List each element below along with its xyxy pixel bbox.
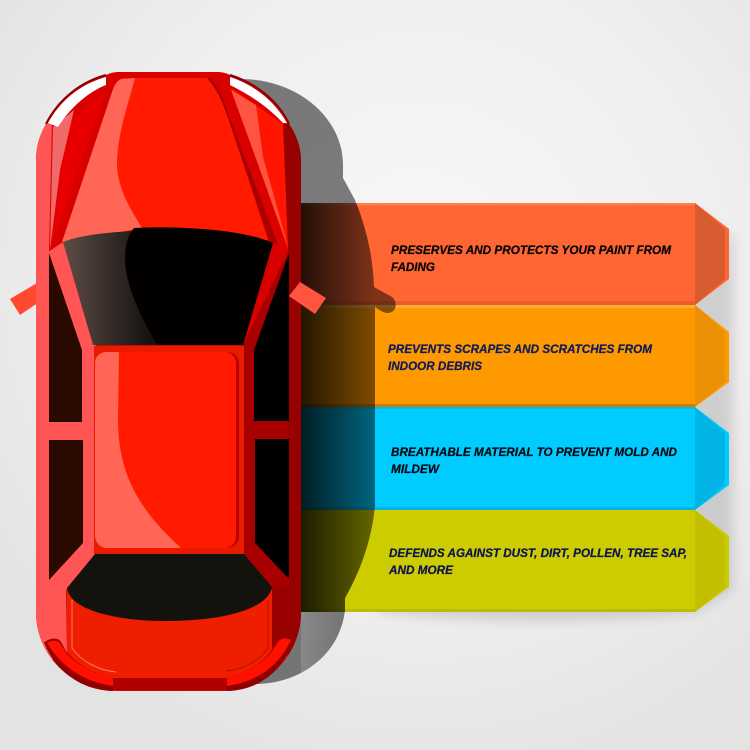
banner 4: dust and dirt: DEFENDS AGAINST DUST, DIRT, POLLEN, TREE SAP,	[389, 546, 687, 560]
left pillar	[48, 242, 96, 400]
banner 2: scratches: INDOOR DEBRIS	[388, 359, 482, 373]
car	[30, 72, 308, 691]
banner 4: dust and dirt	[295, 510, 729, 612]
trunk trim	[72, 600, 116, 672]
banner 3: breathable: MILDEW	[391, 462, 441, 476]
lower shadow lightening near car	[301, 612, 323, 672]
banner 2: scratches	[295, 305, 729, 407]
right mirror	[289, 282, 326, 314]
banner 4: dust and dirt: AND MORE	[388, 563, 454, 577]
left tail light	[44, 639, 113, 691]
banners	[295, 203, 729, 612]
right fender highlight	[231, 90, 288, 247]
right fender	[231, 88, 288, 250]
banner 3: breathable: BREATHABLE MATERIAL TO PREVENT MOLD AND	[391, 445, 677, 459]
hood	[62, 78, 268, 242]
banner 3: breathable	[295, 407, 729, 510]
left front window	[49, 253, 82, 422]
right headlight	[230, 77, 287, 123]
rear window	[67, 554, 272, 621]
body side panels	[36, 122, 301, 660]
left fender	[49, 92, 105, 252]
roof highlight	[95, 352, 181, 548]
headlight rims	[46, 75, 289, 124]
roof	[94, 346, 244, 554]
left fender highlight	[50, 110, 74, 250]
left mirror	[10, 283, 45, 315]
left headlight	[48, 77, 106, 127]
banner 1: paint protection: PRESERVES AND PROTECTS YOUR PAINT FROM	[391, 243, 672, 257]
car body	[36, 72, 301, 691]
windshield	[63, 230, 273, 345]
left rear window	[49, 440, 83, 580]
roof panel inner	[95, 352, 236, 548]
hood highlight	[62, 78, 142, 242]
right tail light	[227, 637, 293, 691]
rear bumper	[113, 678, 227, 690]
right front window	[254, 253, 289, 421]
roof panel	[95, 352, 239, 548]
right hood crease	[207, 78, 278, 245]
banner 1: paint protection: FADING	[391, 260, 435, 274]
banner 2: scratches: PREVENTS SCRAPES AND SCRATCHES FROM	[388, 342, 653, 356]
trunk	[67, 590, 272, 678]
banner shading under car shadow	[301, 203, 375, 612]
car drop shadow	[240, 79, 396, 684]
banner 1: paint protection	[295, 203, 729, 305]
right rear window	[255, 439, 289, 579]
windshield dark reflection	[125, 227, 273, 345]
soft shadow behind banners	[380, 215, 733, 621]
